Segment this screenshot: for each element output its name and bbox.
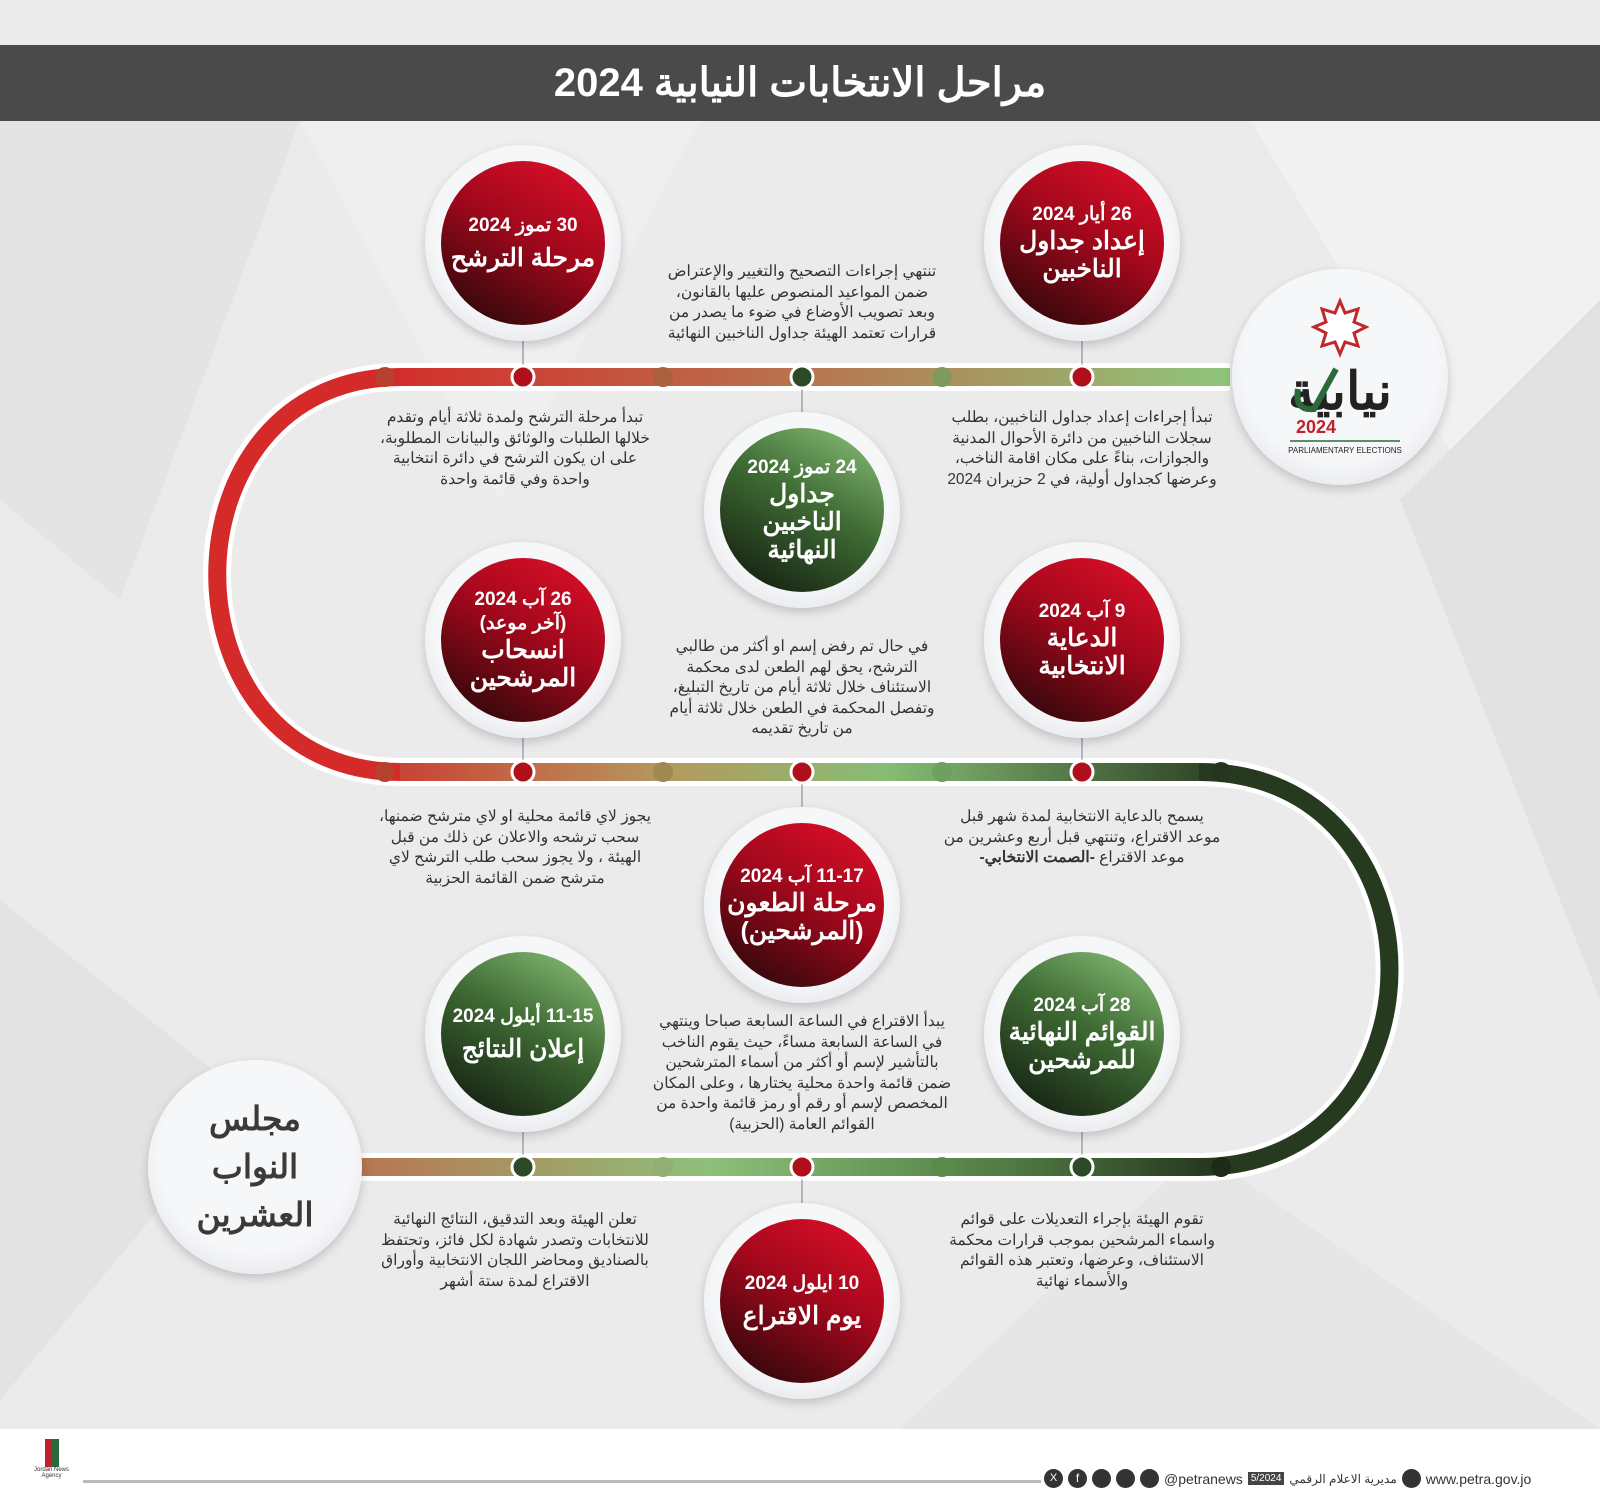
circle: 26 ayar: إعداد جداول (1019, 227, 1145, 255)
logo circle: 2024 (1296, 417, 1336, 437)
footer social (1044, 1469, 1531, 1488)
text: سجلات الناخبين من دائرة الأحوال المدنية (952, 430, 1212, 446)
end circle: majlis: العشرين (196, 1196, 314, 1233)
circle: 26 aab: 26 آب 2024 (474, 589, 572, 610)
footer social: www.petra.gov.jo (1426, 1470, 1531, 1486)
circle: 11-17 aab (704, 807, 900, 1003)
text: موعد الاقتراع، وتنتهي قبل أربع وعشرين من (944, 828, 1220, 846)
text: وعرضها كجداول أولية، في 2 حزيران 2024 (947, 470, 1217, 488)
text: بالتأشير لإسم أو أكثر من أسماء المترشحين (665, 1054, 939, 1071)
footer (0, 1429, 1600, 1511)
circle: 11-15 aylul: 11-15 أيلول 2024 (453, 1006, 593, 1027)
text: بالصناديق ومحاضر اللجان الانتخابية وأوراق (381, 1252, 649, 1269)
circle: 26 aab: انسحاب (481, 636, 565, 664)
circle: 24 tammuz (704, 412, 900, 608)
text: المخصص لإسم أو رقم أو رمز قائمة واحدة من (656, 1095, 948, 1112)
title bar: مراحل الانتخابات النيابية 2024 (554, 61, 1046, 105)
circle: 11-15 aylul: إعلان النتائج (462, 1035, 584, 1063)
circle: 9 aab: الدعاية (1047, 624, 1117, 652)
circle: 28 aab (984, 936, 1180, 1132)
text: يبدأ الاقتراع في الساعة السابعة صباحا وينتهي (659, 1013, 945, 1030)
circle: 24 tammuz: 24 تموز 2024 (747, 457, 857, 478)
text: تبدأ إجراءات إعداد جداول الناخبين، بطلب (951, 409, 1213, 426)
circle: 28 aab: 28 آب 2024 (1033, 995, 1131, 1016)
logo circle: نيابية (1288, 363, 1392, 421)
text: من تاريخ تقديمه (751, 720, 853, 737)
text blocks: قرارات تعتمد الهيئة جداول الناخبين النهائية (668, 324, 936, 342)
text blocks: ضمن المواعيد المنصوص عليها بالقانون، (676, 284, 928, 300)
text: يجوز لاي قائمة محلية او لاي مترشح ضمنها، (379, 808, 651, 825)
logo circle (1232, 269, 1448, 485)
text: الاقتراع لمدة ستة أشهر (440, 1272, 590, 1290)
circle: 11-17 aab: مرحلة الطعون (727, 889, 877, 917)
footer social: X (1050, 1472, 1057, 1484)
text: موعد الاقتراع -الصمت الانتخابي- (979, 849, 1185, 866)
text: والجوازات، بناءً على مكان اقامة الناخب، (955, 450, 1209, 467)
connectors (523, 335, 1082, 1205)
circle: 30 tammuz: 30 تموز 2024 (468, 215, 578, 236)
text blocks: وبعد تصويب الأوضاع في ضوء ما يصدر من (669, 304, 935, 321)
end circle: majlis: النواب (212, 1148, 298, 1185)
footer social: 5/2024 (1251, 1473, 1281, 1484)
circle: 26 ayar (984, 145, 1180, 341)
end circle: majlis: مجلس (209, 1100, 301, 1137)
end circle: majlis (148, 1060, 362, 1274)
text: الهيئة ، ولا يجوز سحب طلب الترشح لاي (389, 849, 641, 866)
circle: 26 aab: (آخر موعد) (480, 613, 566, 634)
text: في الساعة السابعة مساءً، حيث يقوم الناخب (662, 1034, 942, 1050)
circle: 11-17 aab: 11-17 آب 2024 (740, 866, 864, 887)
circle: 9 aab: الانتخابية (1038, 652, 1126, 680)
text: الاستئناف، وعرضها، وتعتبر هذه القوائم (960, 1252, 1204, 1269)
text: واسماء المرشحين بموجب قرارات محكمة (949, 1232, 1215, 1248)
circle: 30 tammuz: مرحلة الترشح (451, 244, 595, 272)
logo circle: PARLIAMENTARY ELECTIONS (1288, 446, 1402, 455)
circle: 10 aylul: يوم الاقتراع (743, 1302, 861, 1330)
text: تعلن الهيئة وبعد التدقيق، النتائج النهائية (393, 1211, 637, 1228)
circle: 24 tammuz: الناخبين (762, 508, 842, 536)
text blocks: تنتهي إجراءات التصحيح والتغيير والإعتراض (668, 263, 936, 280)
footer social: @petranews (1164, 1470, 1243, 1486)
footer logo: Jordan News Agency (34, 1467, 69, 1479)
text: مترشح ضمن القائمة الحزبية (425, 870, 605, 886)
circle: 11-17 aab: (المرشحين) (740, 917, 864, 945)
circle: 28 aab: للمرشحين (1028, 1046, 1136, 1074)
circle: 26 ayar: الناخبين (1042, 255, 1122, 283)
circle: 11-15 aylul (425, 936, 621, 1132)
text: وتفصل المحكمة في الطعن خلال ثلاثة أيام (669, 700, 935, 716)
circle: 26 aab (425, 542, 621, 738)
text blocks (668, 263, 936, 342)
text: يسمح بالدعاية الانتخابية لمدة شهر قبل (960, 808, 1204, 825)
text: واحدة وفي قائمة واحدة (440, 470, 590, 488)
text: ضمن قائمة واحدة محلية يختارها ، وعلى المكان (653, 1074, 951, 1092)
circle: 9 aab: 9 آب 2024 (1039, 601, 1125, 622)
text: للانتخابات وتصدر شهادة لكل فائز، وتحتفظ (381, 1232, 649, 1248)
text: الترشح، يحق لهم الطعن لدى محكمة (686, 658, 918, 676)
circle: 28 aab: القوائم النهائية (1009, 1018, 1155, 1046)
text: في حال تم رفض إسم او أكثر من طالبي (676, 638, 928, 655)
text: على ان يكون الترشح في دائرة انتخابية (393, 450, 637, 467)
footer social: f (1076, 1471, 1079, 1485)
circle: 24 tammuz: جداول (769, 480, 835, 508)
text: والأسماء نهائية (1036, 1272, 1128, 1290)
circle: 26 aab: المرشحين (470, 664, 576, 692)
text: تبدأ مرحلة الترشح ولمدة ثلاثة أيام وتقدم (387, 409, 643, 426)
circle: 26 ayar: 26 أيار 2024 (1032, 204, 1132, 225)
text: تقوم الهيئة بإجراء التعديلات على قوائم (960, 1211, 1204, 1228)
circle: 30 tammuz (425, 145, 621, 341)
title bar (0, 45, 1600, 121)
text: خلالها الطلبات والوثائق والبيانات المطلوبة، (380, 430, 650, 446)
circle: 10 aylul (704, 1203, 900, 1399)
text: القوائم العامة (الحزبية) (729, 1116, 875, 1132)
text: سحب ترشحه والاعلان عن ذلك من قبل (391, 828, 639, 846)
text: الاستئناف خلال ثلاثة أيام من تاريخ التبليغ، (673, 679, 931, 696)
footer social: مديرية الاعلام الرقمي (1289, 1472, 1397, 1486)
circle: 9 aab (984, 542, 1180, 738)
circle: 10 aylul: 10 ايلول 2024 (745, 1273, 859, 1294)
circle: 24 tammuz: النهائية (767, 536, 837, 564)
footer logo (34, 1439, 69, 1479)
